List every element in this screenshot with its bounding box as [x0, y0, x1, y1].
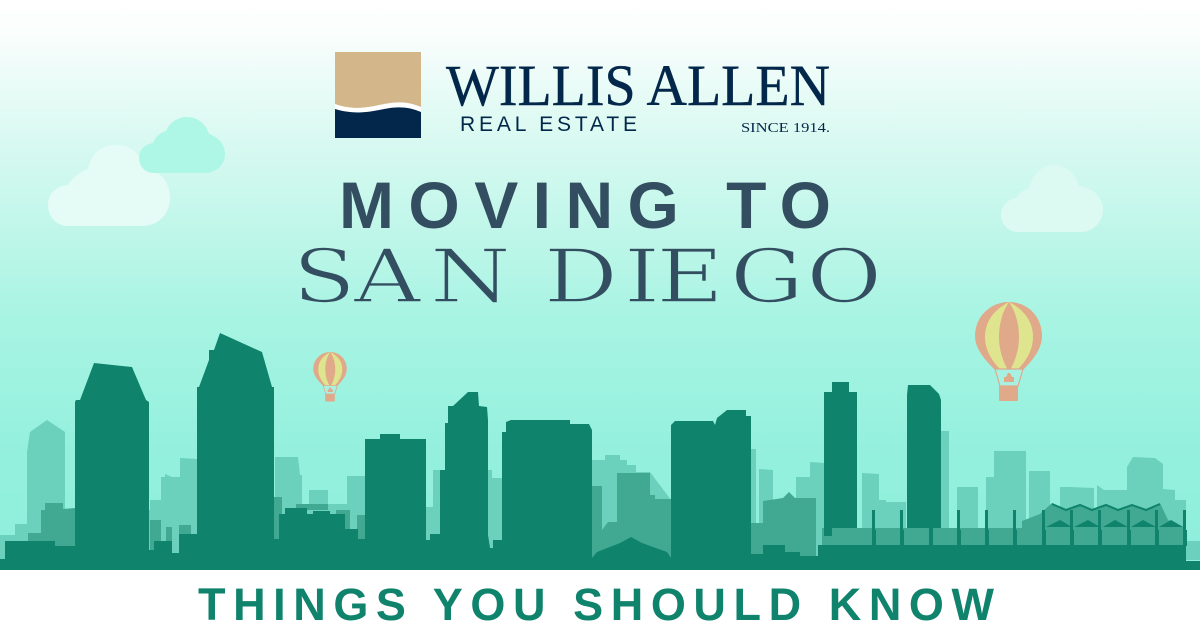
logo since line: SINCE 1914.	[741, 121, 830, 136]
logo mark	[335, 52, 421, 138]
logo	[335, 52, 830, 138]
skyline: pier poles	[872, 510, 1187, 546]
cloud: right	[1001, 165, 1103, 232]
balloon: small	[313, 352, 347, 402]
skyline: twin towers by the water	[824, 382, 941, 536]
balloon: large	[975, 302, 1042, 401]
title: san diego: SANDIEGO	[292, 233, 882, 320]
cloud: teal left	[139, 117, 225, 173]
tagline: THINGS YOU SHOULD KNOW	[198, 579, 995, 630]
cloud: large left	[48, 145, 170, 226]
skyline: middle buildings	[28, 473, 1186, 560]
logo wordmark: WILLIS ALLEN	[446, 53, 830, 118]
skyline: foreground buildings	[0, 333, 1200, 570]
title: moving to: MOVING TO	[339, 168, 831, 242]
skyline: waterfront pavilion	[1022, 503, 1186, 528]
skyline: far buildings	[0, 420, 1200, 560]
logo subtitle: REAL ESTATE	[460, 113, 637, 136]
